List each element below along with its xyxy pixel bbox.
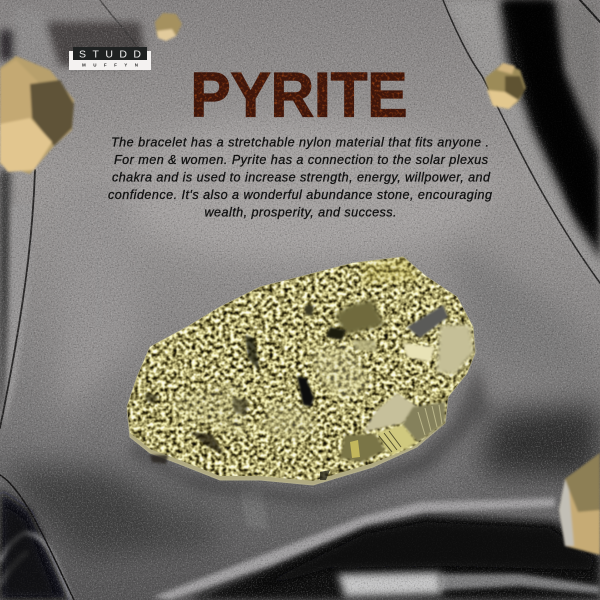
icon: pyrite nugget, bottom right [559, 453, 600, 555]
folds top left [15, 8, 48, 62]
rock crystalline texture [127, 257, 475, 481]
logo: Studd Muffyn [69, 47, 151, 70]
text block: description: For men & women. Pyrite has a connection to the solar plexus [114, 153, 489, 167]
satin highlight: bottom glow [338, 572, 442, 597]
text block: description [108, 136, 492, 220]
text block: description: confidence. It's also a wonderful abundance stone, encouraging [108, 188, 492, 202]
text block: description: wealth, prosperity, and success. [204, 206, 396, 220]
icon: pyrite nugget, top centre [155, 13, 182, 41]
icon: pyrite nugget, top right [485, 63, 526, 109]
logo: Studd Muffyn: STUDD [79, 48, 141, 60]
rock shadow [130, 365, 490, 505]
icon: pyrite nugget, top left [0, 56, 74, 174]
right fold light band [445, 0, 600, 282]
black folds [497, 0, 600, 262]
logo: Studd Muffyn: MUFFYN [82, 62, 138, 68]
satin highlights [0, 205, 600, 600]
text block: description: chakra and is used to increase strength, energy, willpower, and [112, 170, 491, 184]
rock facets and pockets [145, 258, 474, 480]
title: PYRITE: PYRITE [190, 60, 408, 130]
pyrite rock specimen [127, 257, 490, 505]
text block: description: The bracelet has a stretchable nylon material that fits anyone . [111, 136, 489, 150]
right grey panel [555, 0, 600, 180]
rock base colour [127, 257, 475, 485]
